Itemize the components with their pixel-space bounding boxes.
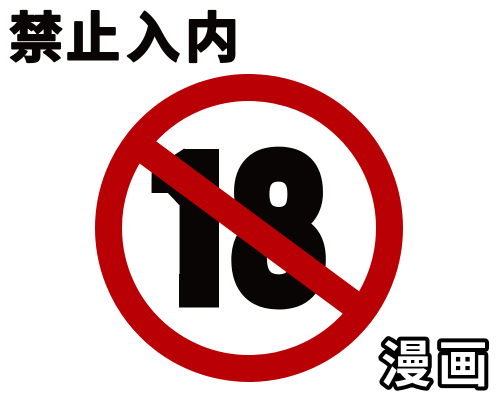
title: 禁止入内: 内	[185, 9, 239, 69]
number 18: 1	[137, 108, 255, 349]
title: 禁止入内: 止	[66, 9, 120, 69]
label: 漫画: 漫	[381, 337, 431, 393]
label: 漫画: 画	[438, 337, 488, 393]
number 18: 8	[232, 112, 325, 345]
title: 禁止入内	[9, 9, 239, 69]
red ring	[108, 88, 390, 368]
label: 漫画	[381, 337, 488, 393]
prohibition sign	[108, 88, 390, 368]
title: 禁止入内: 入	[126, 9, 180, 69]
title: 禁止入内: 禁	[9, 9, 63, 69]
number 18	[152, 146, 326, 310]
diagonal bar	[131, 136, 366, 319]
